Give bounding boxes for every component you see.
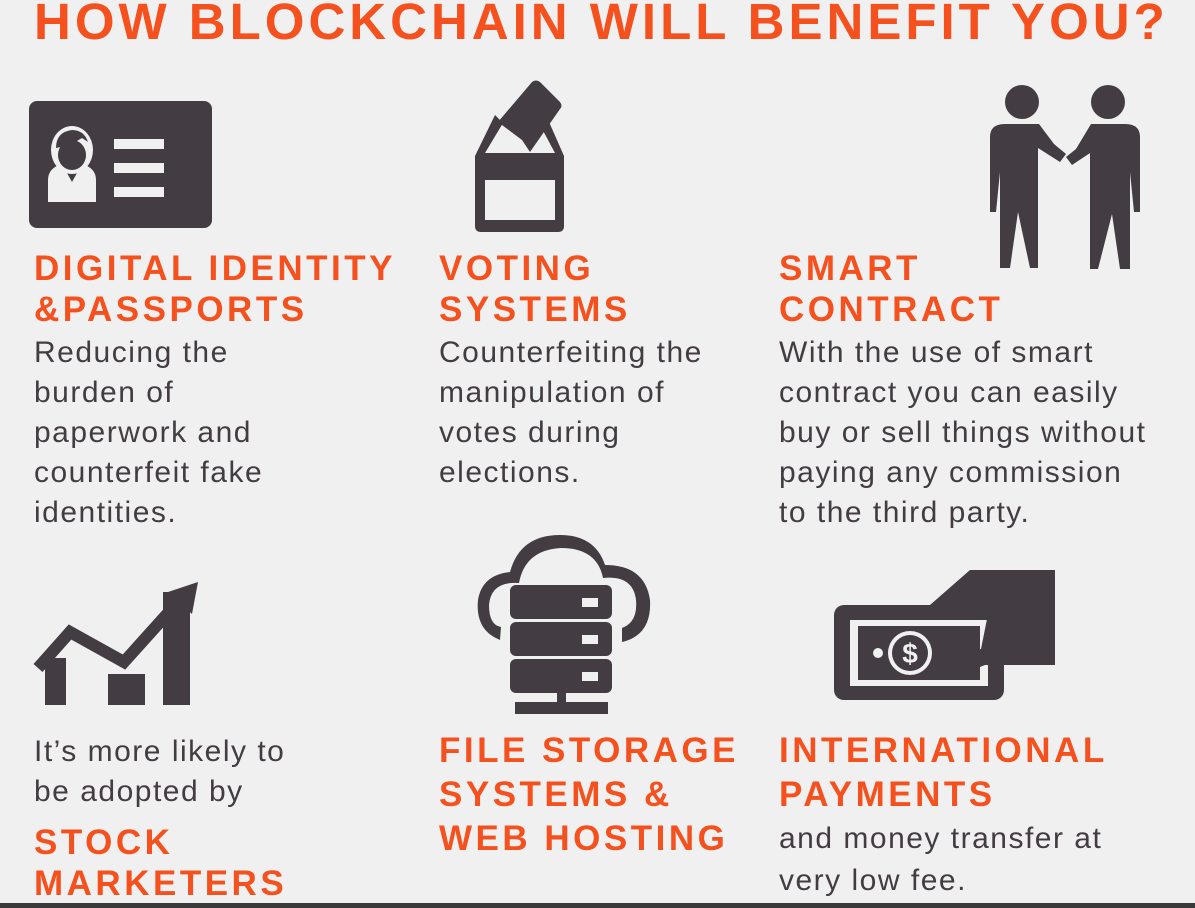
text: stock: be adopted by [34,775,244,808]
text: stock: It’s more likely to [34,735,285,768]
text: voting: manipulation of [439,376,665,409]
icon: money hand [834,570,1055,700]
heading: voting: VOTING [439,249,594,288]
heading: international payments [779,731,1108,814]
icon: money hand: $ [902,638,918,669]
text: smart contract: contract you can easily [779,376,1119,409]
heading: voting: SYSTEMS [439,290,631,329]
text: digital identity: identities. [34,496,177,529]
heading: file storage: FILE STORAGE [439,731,739,770]
icon: id card [29,101,212,228]
text: digital identity: counterfeit fake [34,456,263,489]
text: digital identity [34,336,263,529]
text: voting: Counterfeiting the [439,336,703,369]
text: smart contract [779,336,1147,529]
text: smart contract: paying any commission [779,456,1122,489]
heading: smart contract: CONTRACT [779,290,1003,329]
icon: cloud server [478,535,650,714]
text: digital identity: burden of [34,376,174,409]
heading: file storage: WEB HOSTING [439,819,728,858]
text: international: very low fee. [779,864,967,897]
heading: digital identity: &PASSPORTS [34,290,308,329]
text: smart contract: buy or sell things without [779,416,1147,449]
text: stock [34,735,285,808]
heading: smart contract [779,249,1003,329]
heading: smart contract: SMART [779,249,921,288]
text: digital identity: paperwork and [34,416,252,449]
text: voting: votes during [439,416,620,449]
text: smart contract: to the third party. [779,496,1030,529]
heading: file storage: SYSTEMS & [439,775,673,814]
heading: digital identity: DIGITAL IDENTITY [34,249,396,288]
text: international: and money transfer at [779,822,1102,855]
heading: international payments: INTERNATIONAL [779,731,1108,770]
heading: digital identity [34,249,396,329]
heading: stock marketers [34,823,287,903]
heading: stock marketers: STOCK [34,823,173,862]
icon: ballot box [475,80,564,232]
icon: handshake [990,85,1140,269]
heading: voting [439,249,631,329]
text: international [779,822,1102,897]
text: digital identity: Reducing the [34,336,229,369]
icon: stock chart [34,582,198,705]
text: voting [439,336,703,489]
text: voting: elections. [439,456,581,489]
heading: file storage [439,731,739,858]
heading: stock marketers: MARKETERS [34,864,287,903]
text: smart contract: With the use of smart [779,336,1094,369]
heading: international payments: PAYMENTS [779,775,996,814]
